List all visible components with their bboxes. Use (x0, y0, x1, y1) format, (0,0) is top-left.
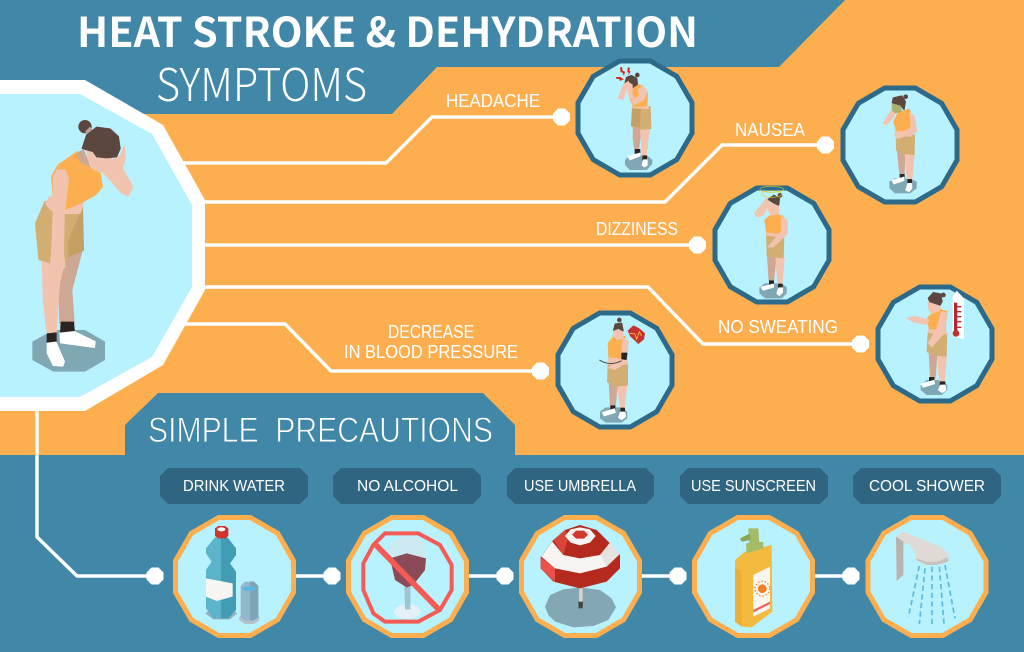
panel: no sweating (878, 287, 992, 401)
icon: pain bolts (616, 67, 631, 81)
header banner (0, 0, 845, 114)
panel: use umbrella (522, 518, 640, 636)
pill: cool shower: COOL SHOWER (869, 478, 985, 495)
icon: crossed out wine glass (363, 533, 452, 622)
label: no sweating: NO SWEATING (718, 317, 838, 337)
pill: cool shower (853, 468, 1001, 504)
title: HEAT STROKE & DEHYDRATION (77, 0, 698, 59)
figure: woman not sweating (907, 291, 964, 395)
pill: drink water: DRINK WATER (183, 478, 285, 495)
label: nausea: NAUSEA (735, 120, 805, 140)
panel: cool shower (868, 518, 986, 636)
panel: no alcohol (348, 518, 466, 636)
connector end dots (146, 108, 869, 584)
pill: no alcohol (333, 468, 481, 504)
icon: beach umbrella (541, 525, 620, 627)
icon: sunscreen bottle (735, 528, 772, 627)
pill: drink water (160, 468, 308, 504)
bottom panel (0, 393, 1024, 652)
figure: woman with cuff (599, 318, 645, 423)
figure: woman with nausea (883, 94, 917, 193)
figure: woman with headache (616, 67, 652, 170)
pill: use sunscreen (680, 468, 828, 504)
label: headache: HEADACHE (446, 91, 540, 111)
icon: shower head (896, 532, 955, 627)
panel: dizziness (715, 186, 829, 302)
pill: no alcohol: NO ALCOHOL (357, 478, 458, 495)
icon: heart (628, 325, 645, 344)
heading: symptoms: SYMPTOMS (156, 49, 367, 114)
panel: headache (578, 61, 692, 175)
pill: use sunscreen: USE SUNSCREEN (691, 478, 816, 495)
panel: drink water (176, 518, 294, 636)
panel: main figure (0, 80, 205, 411)
pill: use umbrella: USE UMBRELLA (524, 478, 636, 495)
label: decrease in blood pressure: DECREASE (388, 322, 474, 342)
panel: use sunscreen (694, 518, 812, 636)
label: decrease in blood pressure (344, 322, 518, 362)
icon: thermometer (953, 291, 964, 339)
figure: woman holding her head (32, 120, 133, 372)
connector lines: precautions (37, 405, 851, 576)
panel: nausea (843, 88, 957, 202)
figure: woman with dizziness (755, 186, 787, 298)
panel: decrease in blood pressure (558, 313, 672, 427)
label: decrease in blood pressure: IN BLOOD PRESSURE (344, 342, 518, 362)
heading: simple precautions: SIMPLE PRECAUTIONS (148, 411, 493, 450)
connector lines: symptoms (180, 117, 860, 371)
label: dizziness: DIZZINESS (596, 219, 678, 239)
icon: water bottle and glass (205, 526, 259, 624)
pill: use umbrella (507, 468, 654, 504)
icon: dizzy rings (760, 186, 783, 197)
